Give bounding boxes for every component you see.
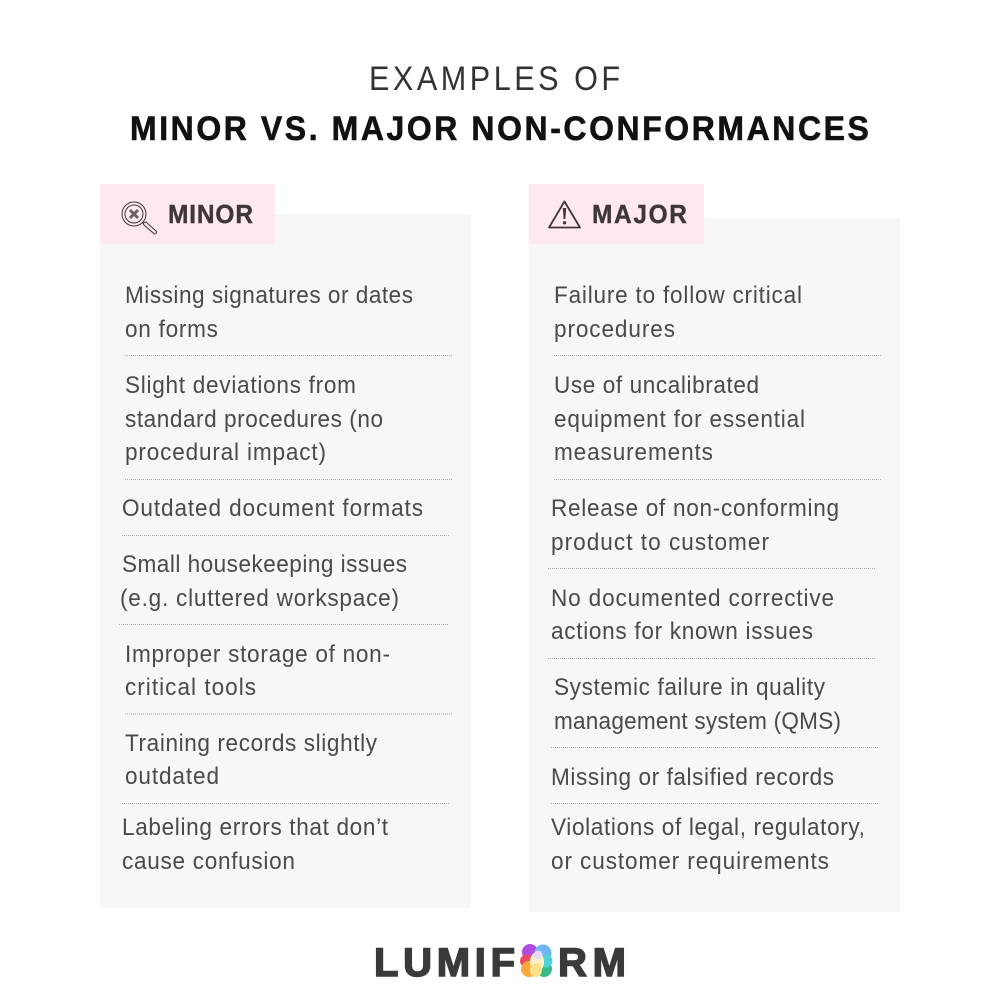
major item: uncalibrated equipment: equipment for essential bbox=[554, 405, 805, 432]
icon: warning triangle bbox=[549, 202, 580, 228]
minor item: slight deviations: standard procedures (no bbox=[125, 405, 383, 432]
minor heading tab bbox=[100, 184, 275, 244]
major item: systemic failure: management system (QMS) bbox=[554, 707, 841, 734]
minor item: slight deviations: Slight deviations from bbox=[125, 371, 356, 398]
minor item: housekeeping: Small housekeeping issues bbox=[122, 550, 407, 577]
major item: non-conforming product: Release of non-conforming bbox=[551, 494, 839, 521]
minor item: labeling errors: Labeling errors that don’t bbox=[122, 813, 389, 840]
icon: magnifying glass with x bbox=[122, 202, 157, 234]
logo: Lumiform: RM bbox=[558, 941, 626, 985]
minor item: training records: outdated bbox=[125, 762, 219, 789]
minor item: training records: Training records slightly bbox=[125, 729, 377, 756]
minor item: improper storage: critical tools bbox=[125, 673, 256, 700]
logo: Lumiform bbox=[374, 941, 626, 985]
major item: violations: Violations of legal, regulatory, bbox=[551, 813, 865, 840]
title: EXAMPLES OF bbox=[369, 60, 620, 97]
minor item: housekeeping: (e.g. cluttered workspace) bbox=[120, 584, 399, 611]
minor item: housekeeping bbox=[120, 550, 407, 611]
major heading tab: MAJOR bbox=[592, 200, 687, 229]
minor item: labeling errors: cause confusion bbox=[122, 847, 295, 874]
major item: critical procedures: procedures bbox=[554, 315, 675, 342]
logo: Lumiform: LUMIF bbox=[374, 941, 515, 985]
major item: non-conforming product bbox=[551, 494, 839, 555]
major item: corrective actions: actions for known issues bbox=[551, 617, 813, 644]
minor item: slight deviations: procedural impact) bbox=[125, 438, 326, 465]
major item: uncalibrated equipment: measurements bbox=[554, 438, 713, 465]
minor item: training records bbox=[125, 729, 377, 789]
panel: minor bbox=[100, 184, 471, 908]
minor item: improper storage: Improper storage of non- bbox=[125, 640, 390, 667]
panel: major bbox=[529, 184, 900, 912]
minor item: missing signatures: Missing signatures or dates bbox=[125, 281, 413, 308]
major item: systemic failure bbox=[554, 673, 841, 734]
minor item: improper storage bbox=[125, 640, 390, 700]
minor item: missing signatures bbox=[125, 281, 413, 342]
major heading tab bbox=[529, 184, 704, 244]
minor item: labeling errors bbox=[122, 813, 389, 874]
title: MINOR VS. MAJOR NON-CONFORMANCES bbox=[130, 109, 869, 147]
major item: violations: or customer requirements bbox=[551, 847, 829, 874]
icon: rainbow logo petals bbox=[520, 944, 552, 977]
title bbox=[130, 60, 869, 147]
major item: uncalibrated equipment: Use of uncalibrated bbox=[554, 371, 759, 398]
major item: critical procedures bbox=[554, 281, 802, 342]
minor item: missing signatures: on forms bbox=[125, 315, 218, 342]
major item: falsified records: Missing or falsified records bbox=[551, 763, 834, 790]
minor heading tab: MINOR bbox=[168, 200, 253, 229]
minor item: slight deviations bbox=[125, 371, 383, 465]
major item: corrective actions: No documented corrective bbox=[551, 584, 834, 611]
major item: critical procedures: Failure to follow critical bbox=[554, 281, 802, 308]
major item: systemic failure: Systemic failure in quality bbox=[554, 673, 825, 700]
minor item: outdated formats: Outdated document formats bbox=[122, 494, 423, 521]
major item: violations bbox=[551, 813, 865, 874]
major item: non-conforming product: product to customer bbox=[551, 528, 769, 555]
major item: uncalibrated equipment bbox=[554, 371, 805, 465]
major item: corrective actions bbox=[551, 584, 834, 644]
